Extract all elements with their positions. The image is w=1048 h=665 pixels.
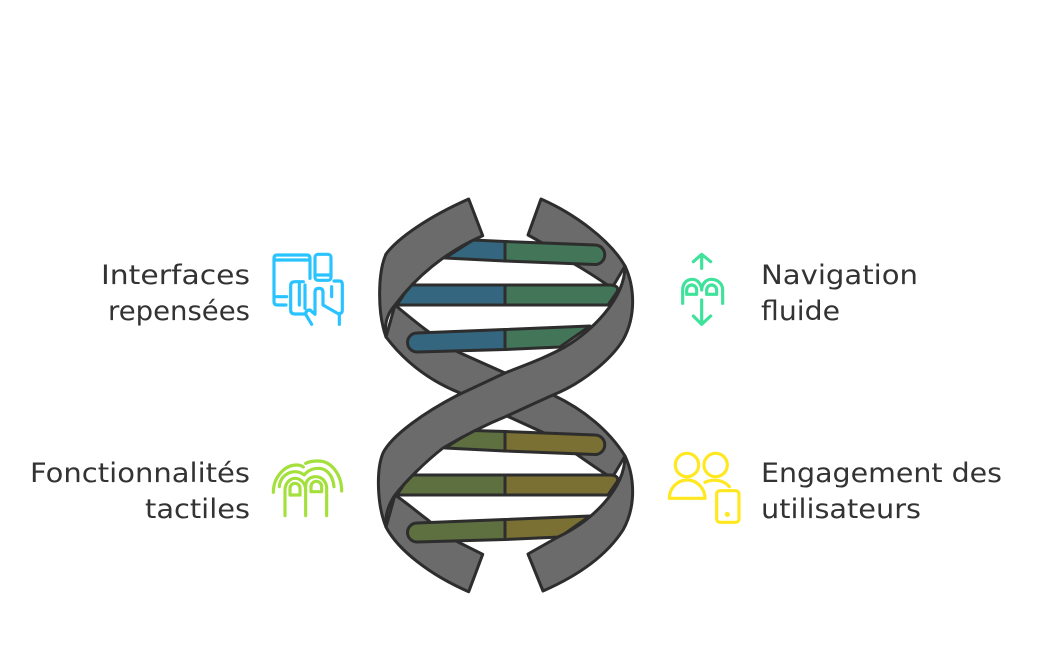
icon: navigation, green: [683, 254, 723, 324]
label: Navigation fluide: fluide: [761, 296, 840, 327]
rungs: lower olive and ochre: [397, 430, 618, 542]
icon: user engagement, yellow: [669, 453, 739, 522]
label: Fonctionnalités tactiles: Fonctionnalités: [30, 458, 250, 489]
rungs: upper blue and green: [397, 240, 618, 352]
label: Interfaces repensées: Interfaces: [101, 260, 250, 291]
front strand: crossing: [378, 266, 633, 527]
label: Navigation fluide: Navigation: [761, 260, 918, 291]
back strand: upper left to lower right: [386, 305, 625, 478]
front strand: top left: [380, 199, 483, 337]
icon: tactile features, lime: [273, 461, 342, 516]
label: Interfaces repensées: [101, 260, 250, 327]
label: Engagement des utilisateurs: [761, 458, 1002, 525]
label: Engagement des utilisateurs: Engagement des: [761, 458, 1002, 489]
label: Navigation fluide: [761, 260, 918, 327]
back strand: bottom left: [386, 495, 483, 592]
label: Fonctionnalités tactiles: tactiles: [145, 494, 250, 525]
front strand: bottom right: [528, 456, 633, 591]
label: Fonctionnalités tactiles: [30, 458, 250, 525]
back strand: top right: [528, 199, 625, 288]
icon: interfaces, blue: [274, 254, 342, 324]
DNA double helix: [378, 199, 633, 592]
label: Interfaces repensées: repensées: [108, 296, 250, 327]
label: Engagement des utilisateurs: utilisateurs: [761, 494, 921, 525]
